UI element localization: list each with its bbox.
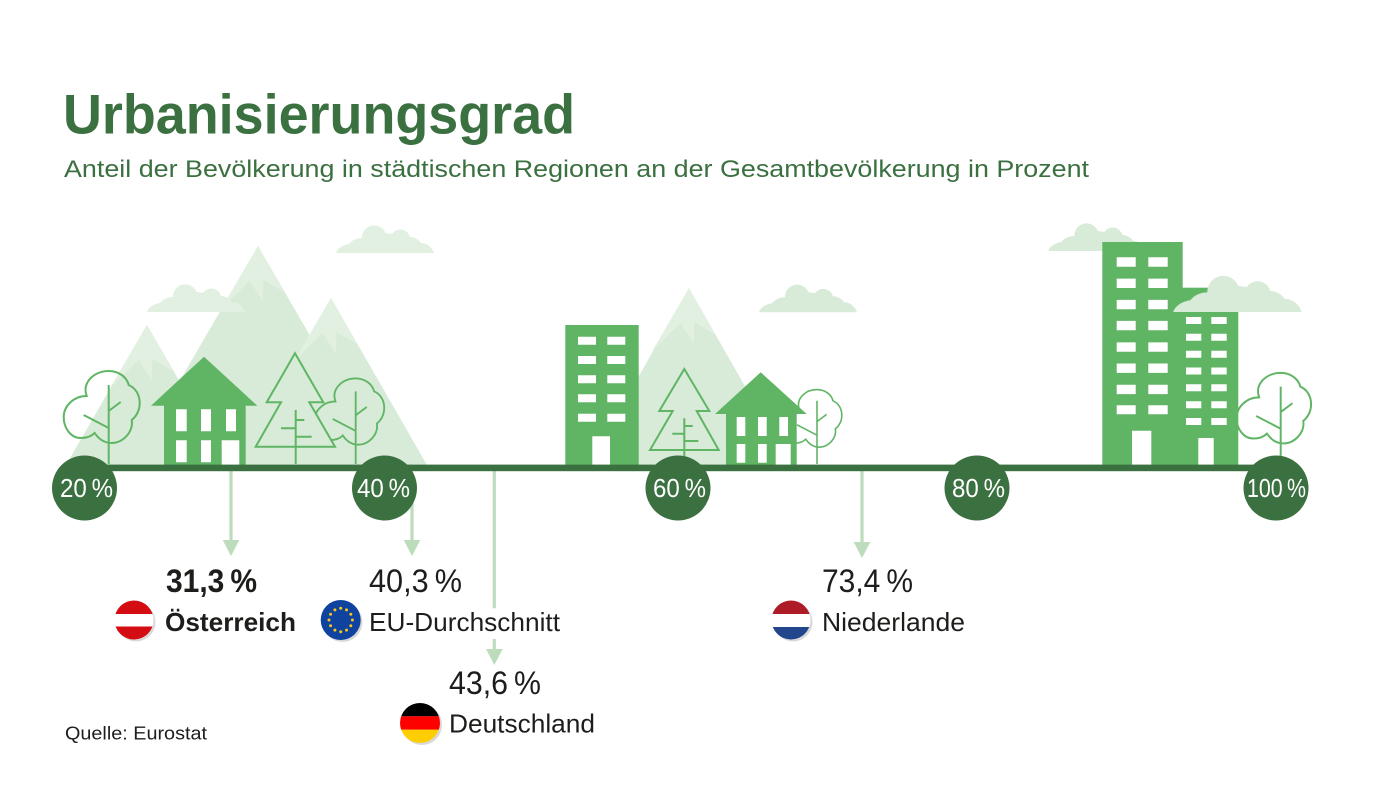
cloud top [336, 225, 434, 253]
arrow: Österreich [223, 470, 239, 556]
icon: house [151, 357, 257, 465]
scale marker 40 %: 40 % [357, 473, 410, 503]
mountain centre [588, 288, 790, 465]
scale marker 80 %: 80 % [952, 473, 1005, 503]
data point: Österreich [114, 563, 296, 642]
scale axis [52, 456, 1308, 520]
label: Niederlande [822, 607, 965, 637]
scale marker 60 %: 60 % [653, 473, 706, 503]
value: 73,4 % [822, 563, 913, 599]
icon: Austrian flag [114, 600, 156, 642]
icon: EU flag [321, 600, 362, 642]
cloud behind tower [1048, 223, 1146, 251]
label: Österreich [165, 607, 296, 637]
icon: tree left [64, 371, 140, 464]
data point: Niederlande [771, 563, 965, 642]
source: Quelle: Eurostat [65, 724, 207, 744]
axis line [84, 465, 1276, 471]
urban illustration [1048, 223, 1311, 465]
mountains left group [66, 246, 427, 465]
mixed landscape illustration [565, 285, 857, 465]
icon: tall tower [1102, 242, 1183, 465]
value: 31,3 % [166, 563, 257, 599]
label: Deutschland [449, 708, 595, 738]
data point: EU-Durchschnitt [321, 563, 561, 642]
icon: high-rise [565, 325, 639, 465]
scale marker 100 %: 100 % [1247, 473, 1306, 503]
scale marker 80 % [944, 456, 1010, 520]
icon: house centre [715, 372, 807, 465]
scale marker 60 % [646, 456, 710, 520]
cloud over tower [1173, 276, 1302, 312]
scale marker 40 % [352, 456, 417, 520]
icon: tree behind house [781, 390, 842, 464]
icon: pine tree centre [650, 369, 719, 464]
scale marker 20 % [52, 456, 117, 520]
title: Urbanisierungsgrad [63, 82, 575, 146]
arrow: Niederlande [854, 470, 870, 558]
cloud over mountain [147, 284, 245, 312]
value: 40,3 % [369, 563, 462, 599]
cloud centre [759, 285, 857, 312]
icon: pine tree [256, 353, 335, 464]
label: EU-Durchschnitt [369, 607, 561, 637]
scale marker 20 %: 20 % [60, 473, 113, 503]
arrows to values [223, 470, 870, 665]
rural landscape illustration [64, 225, 434, 465]
icon: Dutch flag [771, 600, 812, 642]
value: 43,6 % [449, 665, 541, 701]
icon: low tower [1182, 288, 1238, 465]
icon: German flag [400, 703, 442, 745]
icon: tree beside pine [314, 378, 384, 464]
data point: Deutschland [400, 665, 595, 745]
scale marker 100 % [1244, 456, 1308, 520]
subtitle: Anteil der Bevölkerung in städtischen Regionen an der Gesamtbevölkerung in Prozent [64, 156, 1089, 183]
icon: tree right [1237, 373, 1311, 464]
arrow: EU-Durchschnitt [404, 500, 420, 556]
arrow: Deutschland [486, 470, 503, 665]
